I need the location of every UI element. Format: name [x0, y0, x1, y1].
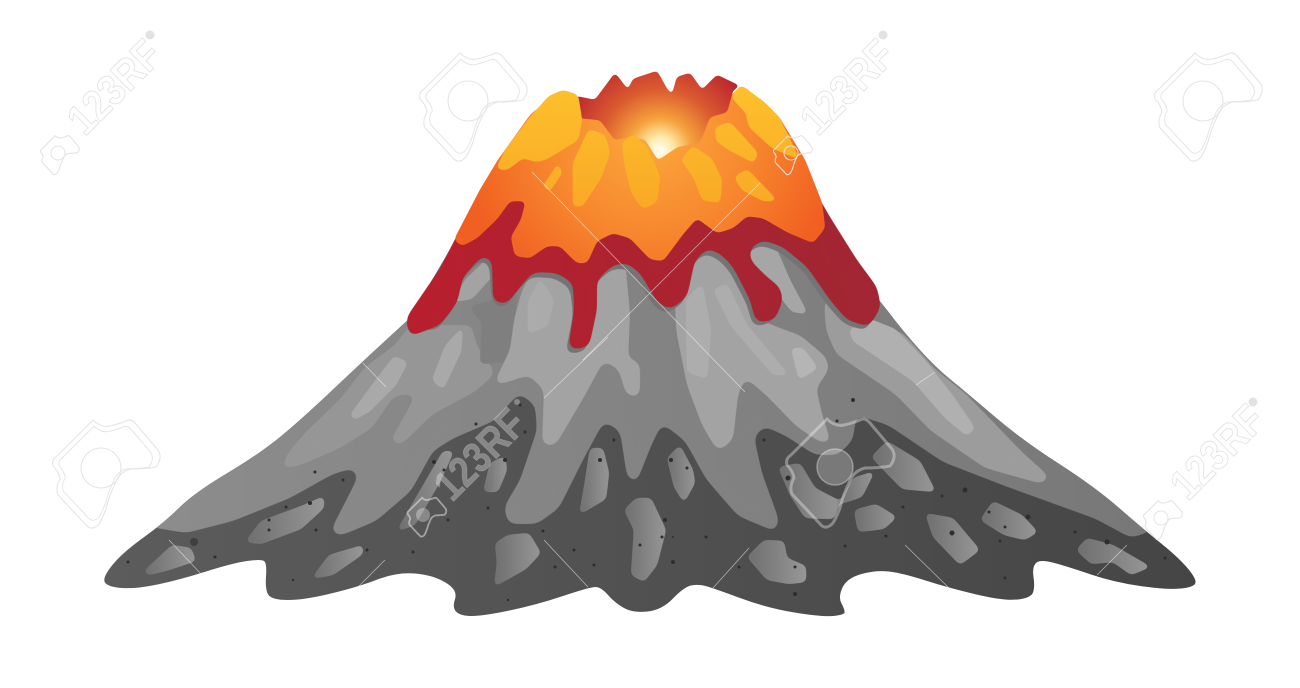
rock dark band under the lava at left [469, 290, 517, 364]
watermark stamp: top centre-left [420, 53, 527, 161]
rock light layer: upper right flank [823, 290, 1051, 484]
rock speckles [126, 398, 1166, 601]
watermark: 123RF over the volcano: 123RF [425, 400, 535, 510]
watermark stamp: lower left [52, 420, 160, 528]
watermark: 123RF lower right [1144, 396, 1274, 540]
watermark: 123RF top centre: 123RF [791, 31, 904, 144]
watermark: 123RF top left: 123RF [58, 31, 171, 144]
rock mid layer: medium grey flows [156, 251, 1147, 536]
rock tongue beside the right drip [747, 236, 808, 314]
watermark stamp: over the volcano [786, 419, 894, 527]
patch: right upper [715, 122, 758, 163]
dark patches on the lower slope [143, 441, 1151, 587]
rock shoulder highlight [453, 256, 496, 302]
patch: centre-left [573, 129, 610, 207]
rock light layer: upper left flank [279, 325, 496, 470]
patch: centre [622, 134, 660, 209]
lava: dark red flow with drips [406, 110, 881, 350]
lava shadow on the rock [406, 242, 870, 353]
patch: small left [543, 164, 562, 191]
watermark: 123RF over the volcano [408, 399, 535, 537]
yellow molten patches [496, 85, 800, 209]
thin watermark cross lines [169, 172, 1127, 588]
mountain rock [104, 215, 1196, 616]
rock lobe: centre-right [675, 244, 832, 452]
lava: orange upper flow [454, 86, 825, 263]
patch: upper left [496, 90, 582, 170]
rock base: dark lower slope [104, 215, 1196, 616]
patch: centre-right [681, 146, 722, 203]
watermark stamp: top right [1154, 53, 1262, 161]
crater with glowing vent [575, 71, 740, 160]
patch: right lower [734, 169, 778, 201]
patch: upper right [731, 85, 800, 160]
rock highlights [350, 278, 975, 436]
watermark: 123RF top centre [774, 30, 904, 175]
rock lobe: centre-left [492, 260, 640, 446]
watermark: 123RF lower right: 123RF [1161, 396, 1274, 509]
watermark: 123RF top left [41, 30, 171, 175]
